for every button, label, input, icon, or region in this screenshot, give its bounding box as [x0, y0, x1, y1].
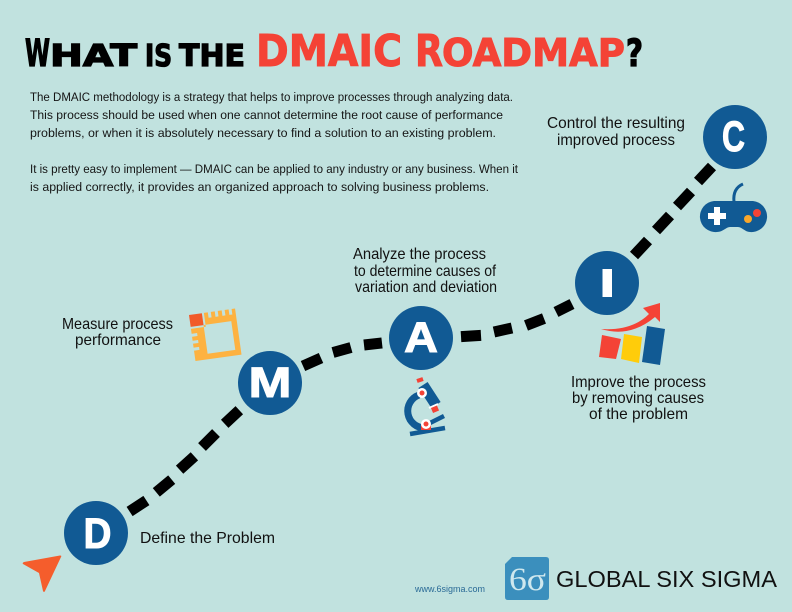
step A circle: A [404, 314, 438, 362]
label: measure: Measure process [62, 316, 173, 333]
label: improve: by removing causes [572, 390, 704, 407]
step A circle [389, 306, 453, 370]
title: THE [179, 39, 245, 74]
logo: Global Six Sigma: GLOBAL SIX SIGMA [556, 566, 778, 592]
label: define: Define the Problem [140, 530, 275, 547]
title: HAT [50, 39, 138, 74]
label: improve [571, 374, 706, 423]
label: measure: performance [75, 332, 161, 349]
label: improve: Improve the process [571, 374, 706, 391]
intro paragraph 1: problems, or when it is absolutely necessary to find a solution to an existing problem. [30, 126, 496, 140]
icon: game controller [700, 184, 767, 232]
step M circle [238, 351, 302, 415]
intro paragraph 1: This process should be used when one cannot determine the root cause of performance [30, 108, 503, 122]
step D circle: D [84, 510, 112, 558]
title [25, 26, 643, 77]
intro paragraph 2: It is pretty easy to implement — DMAIC can be applied to any industry or any business. When it [30, 162, 519, 176]
icon: ruler frame [188, 308, 242, 361]
label: analyze [353, 246, 497, 296]
label: control: Control the resulting [547, 115, 685, 132]
logo: Global Six Sigma: 6σ [509, 562, 546, 598]
step I circle [575, 251, 639, 315]
logo: Global Six Sigma [505, 557, 778, 600]
label: control [547, 115, 685, 149]
title: W [25, 32, 50, 75]
label: improve: of the problem [589, 406, 688, 423]
label: analyze: to determine causes of [354, 263, 496, 280]
website url: www.6sigma.com [414, 584, 485, 595]
intro paragraph 1 [30, 90, 513, 140]
intro paragraph 1: The DMAIC methodology is a strategy that helps to improve processes through analyzing data. [30, 90, 513, 104]
icon: microscope [408, 379, 445, 434]
intro paragraph 2 [30, 162, 519, 194]
label: analyze: Analyze the process [353, 246, 486, 263]
intro paragraph 2: is applied correctly, it provides an organized approach to solving business problems. [30, 180, 489, 194]
title: OADMAP [442, 31, 625, 75]
icon: growth bars and arrow [599, 303, 665, 365]
title: DMAIC [256, 26, 402, 77]
step C circle [703, 105, 767, 169]
label: measure [62, 316, 173, 349]
label: analyze: variation and deviation [355, 279, 497, 296]
step M circle: M [248, 359, 292, 407]
step D circle [64, 501, 128, 565]
icon: navigation arrow [23, 556, 61, 592]
dashed roadmap path [130, 166, 712, 512]
title: ? [626, 32, 643, 75]
title: R [415, 26, 443, 77]
step C circle: C [722, 113, 745, 161]
label: control: improved process [557, 132, 675, 149]
title: IS [145, 39, 172, 74]
